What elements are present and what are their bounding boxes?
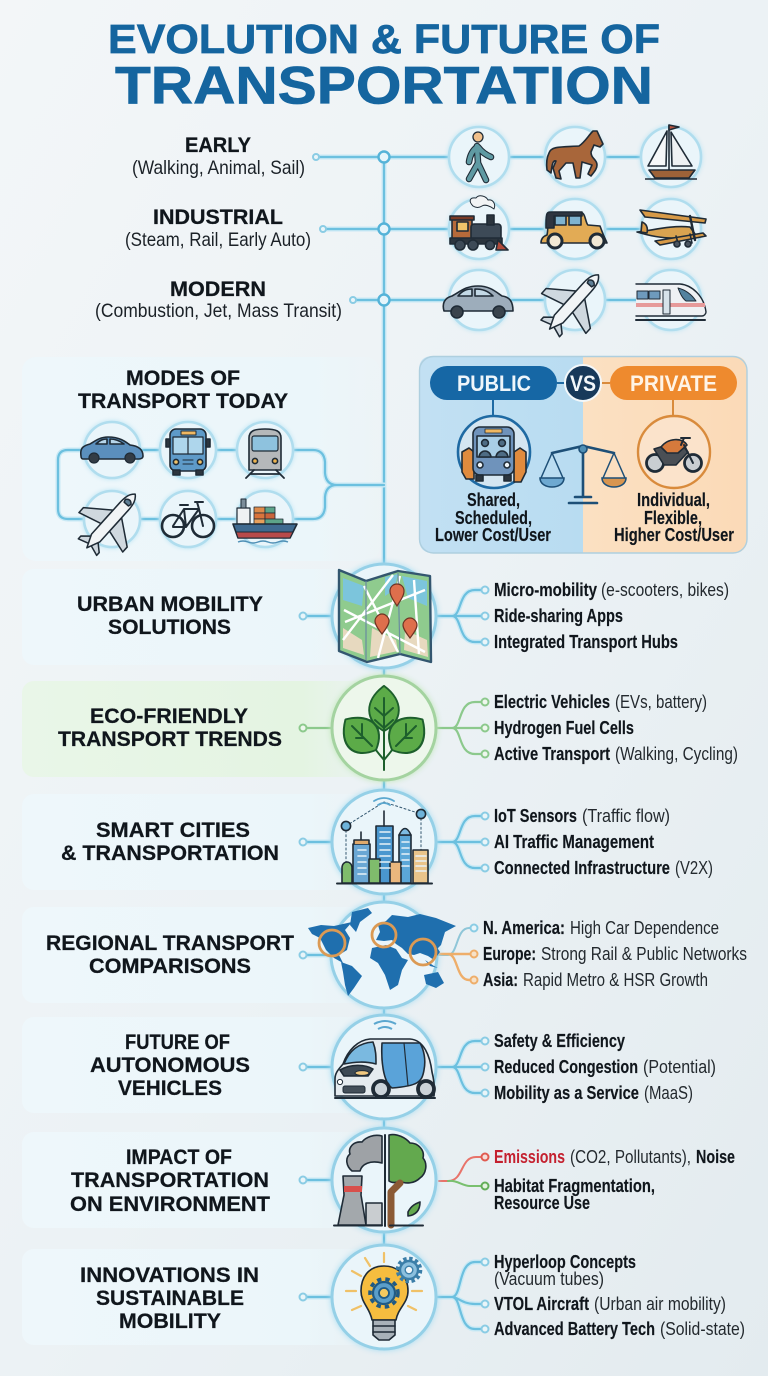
list: Mobility as a Service (494, 1083, 639, 1103)
heading: REGIONAL TRANSPORT (46, 931, 294, 955)
timeline connectors (313, 152, 660, 306)
connector: private stem (600, 383, 673, 428)
heading: IMPACT OF (126, 1145, 232, 1169)
list: (CO2, Pollutants), (570, 1147, 691, 1167)
heading: MOBILITY (119, 1309, 221, 1333)
connectors (300, 812, 488, 872)
section: smart cities (61, 790, 713, 894)
list: (Traffic flow) (582, 806, 670, 826)
list: AI Traffic Management (494, 832, 654, 852)
label: private pill (610, 366, 737, 400)
panel: regional background (22, 907, 372, 1003)
list: Active Transport (494, 744, 610, 764)
section: autonomous vehicles (90, 1015, 716, 1119)
label: VS badge (565, 365, 601, 401)
heading (58, 704, 282, 751)
icon: smart city (332, 790, 436, 894)
heading (90, 1030, 250, 1100)
section: regional comparisons (46, 902, 747, 1008)
list: (Walking, Cycling) (615, 744, 738, 764)
label: VS badge: VS (570, 371, 596, 396)
heading: & TRANSPORTATION (61, 841, 279, 865)
heading: VEHICLES (118, 1076, 222, 1100)
icon: balance scale (540, 445, 626, 503)
list: IoT Sensors (494, 806, 577, 826)
heading: modern: MODERN (170, 277, 266, 301)
heading: FUTURE OF (125, 1030, 230, 1054)
panel: public vs private (419, 356, 747, 553)
heading: SOLUTIONS (108, 615, 231, 639)
panel: innovations background (22, 1249, 372, 1345)
heading: modern (95, 277, 342, 322)
section: eco-friendly (58, 676, 738, 780)
connectors (300, 1038, 488, 1096)
icon: sailboat (641, 125, 701, 187)
heading: TRANSPORTATION (71, 1168, 269, 1192)
text: public attributes: Shared, (467, 490, 520, 510)
icon: horse (545, 127, 605, 187)
list: Resource Use (494, 1193, 590, 1213)
icon: jet airplane (527, 255, 621, 349)
icon: cargo ship (233, 491, 297, 547)
list: (Urban air mobility) (594, 1294, 726, 1314)
heading: ON ENVIRONMENT (70, 1192, 270, 1216)
heading (46, 931, 294, 978)
connectors (300, 586, 488, 646)
connectors (300, 1258, 488, 1332)
heading: modes of transport today: MODES OF (126, 366, 240, 390)
panel: urban mobility background (22, 569, 372, 665)
icon: blue car (81, 422, 143, 478)
list: Micro-mobility (494, 580, 597, 600)
text: private attributes: Flexible, (644, 508, 702, 528)
list: Rapid Metro & HSR Growth (523, 970, 708, 990)
list: Advanced Battery Tech (494, 1319, 655, 1339)
main timeline spine (382, 157, 386, 1250)
section: urban mobility (77, 564, 729, 668)
heading (80, 1263, 259, 1333)
icon: motorcycle (638, 416, 710, 488)
list: Habitat Fragmentation, (494, 1176, 655, 1196)
panel: autonomous background (22, 1017, 372, 1113)
list: VTOL Aircraft (494, 1294, 589, 1314)
icon: city map (332, 564, 436, 668)
text: public attributes: Scheduled, (455, 508, 532, 528)
heading: modes of transport today (78, 366, 288, 413)
icon: vintage car (541, 199, 607, 259)
list: Asia: (483, 970, 518, 990)
icon: walking person (449, 127, 509, 187)
icon: metro train (237, 422, 293, 478)
list: Connected Infrastructure (494, 858, 670, 878)
icon: factory and tree (332, 1128, 436, 1232)
text: private attributes (614, 490, 734, 545)
list (494, 1252, 745, 1339)
label: public pill (430, 366, 557, 400)
connectors (300, 698, 488, 758)
list (494, 1147, 735, 1213)
list: Hyperloop Concepts (494, 1252, 636, 1272)
panel: modes of transport background (22, 357, 380, 561)
connectors (300, 924, 478, 984)
icon: world map (308, 902, 456, 1008)
list: Ride-sharing Apps (494, 606, 623, 626)
heading (70, 1145, 270, 1216)
heading: industrial: INDUSTRIAL (153, 205, 283, 229)
list: Reduced Congestion (494, 1057, 638, 1077)
heading: early: (Walking, Animal, Sail) (132, 157, 305, 179)
list (494, 580, 729, 652)
heading: industrial: (Steam, Rail, Early Auto) (125, 229, 311, 251)
list: Hydrogen Fuel Cells (494, 718, 634, 738)
connector: public stem (493, 383, 568, 428)
section: environmental impact (70, 1128, 735, 1232)
icon: modern car (443, 270, 513, 330)
icon: biplane (637, 199, 706, 259)
list (483, 918, 747, 990)
connectors (300, 1154, 488, 1190)
icon: leaves (332, 676, 436, 780)
list (494, 1031, 716, 1103)
list: (e-scooters, bikes) (601, 580, 729, 600)
title: TRANSPORTATION (115, 56, 653, 116)
heading: ECO-FRIENDLY (90, 704, 248, 728)
list: (Solid-state) (660, 1319, 745, 1339)
icon: public bus with people (458, 416, 530, 488)
text: public attributes (435, 490, 551, 545)
heading: SUSTAINABLE (96, 1286, 244, 1310)
list: Emissions (494, 1147, 565, 1167)
panel: smart cities background (22, 794, 372, 890)
icon: high-speed train (636, 270, 706, 330)
heading: URBAN MOBILITY (77, 592, 263, 616)
list: High Car Dependence (570, 918, 719, 938)
list: Safety & Efficiency (494, 1031, 625, 1051)
list: N. America: (483, 918, 565, 938)
list: Noise (696, 1147, 735, 1167)
icon: autonomous pod (332, 1015, 436, 1119)
list: Integrated Transport Hubs (494, 632, 678, 652)
list: (EVs, battery) (615, 692, 707, 712)
icon: steam locomotive (449, 196, 509, 259)
label: private pill: PRIVATE (630, 371, 717, 396)
title (108, 16, 660, 116)
panel: impact background (22, 1132, 372, 1228)
text: private attributes: Higher Cost/User (614, 525, 734, 545)
label: public pill: PUBLIC (457, 371, 531, 396)
list: (V2X) (675, 858, 713, 878)
heading: modes of transport today: TRANSPORT TODAY (78, 389, 288, 413)
heading: early: EARLY (185, 133, 251, 157)
list: (MaaS) (644, 1083, 693, 1103)
list: (Vacuum tubes) (494, 1269, 604, 1289)
icon: airplane (65, 474, 157, 568)
list (494, 806, 713, 878)
icon: bus (160, 422, 216, 478)
heading: AUTONOMOUS (90, 1053, 250, 1077)
list: Europe: (483, 944, 536, 964)
heading: early (132, 133, 305, 179)
heading: industrial (125, 205, 311, 251)
section: sustainable innovations (80, 1245, 745, 1349)
modes connector network (58, 450, 384, 519)
heading (61, 818, 279, 865)
icon: light bulb with gears (332, 1245, 436, 1349)
text: private attributes: Individual, (637, 490, 710, 510)
title: EVOLUTION & FUTURE OF (108, 16, 660, 62)
heading (77, 592, 263, 639)
list: Electric Vehicles (494, 692, 610, 712)
heading: INNOVATIONS IN (80, 1263, 259, 1287)
list: (Potential) (643, 1057, 716, 1077)
heading: SMART CITIES (96, 818, 250, 842)
heading: COMPARISONS (89, 954, 251, 978)
panel: eco-friendly background (22, 681, 372, 777)
heading: TRANSPORT TRENDS (58, 727, 282, 751)
list (494, 692, 738, 764)
text: public attributes: Lower Cost/User (435, 525, 551, 545)
icon: bicycle (160, 491, 216, 547)
heading: modern: (Combustion, Jet, Mass Transit) (95, 300, 342, 322)
